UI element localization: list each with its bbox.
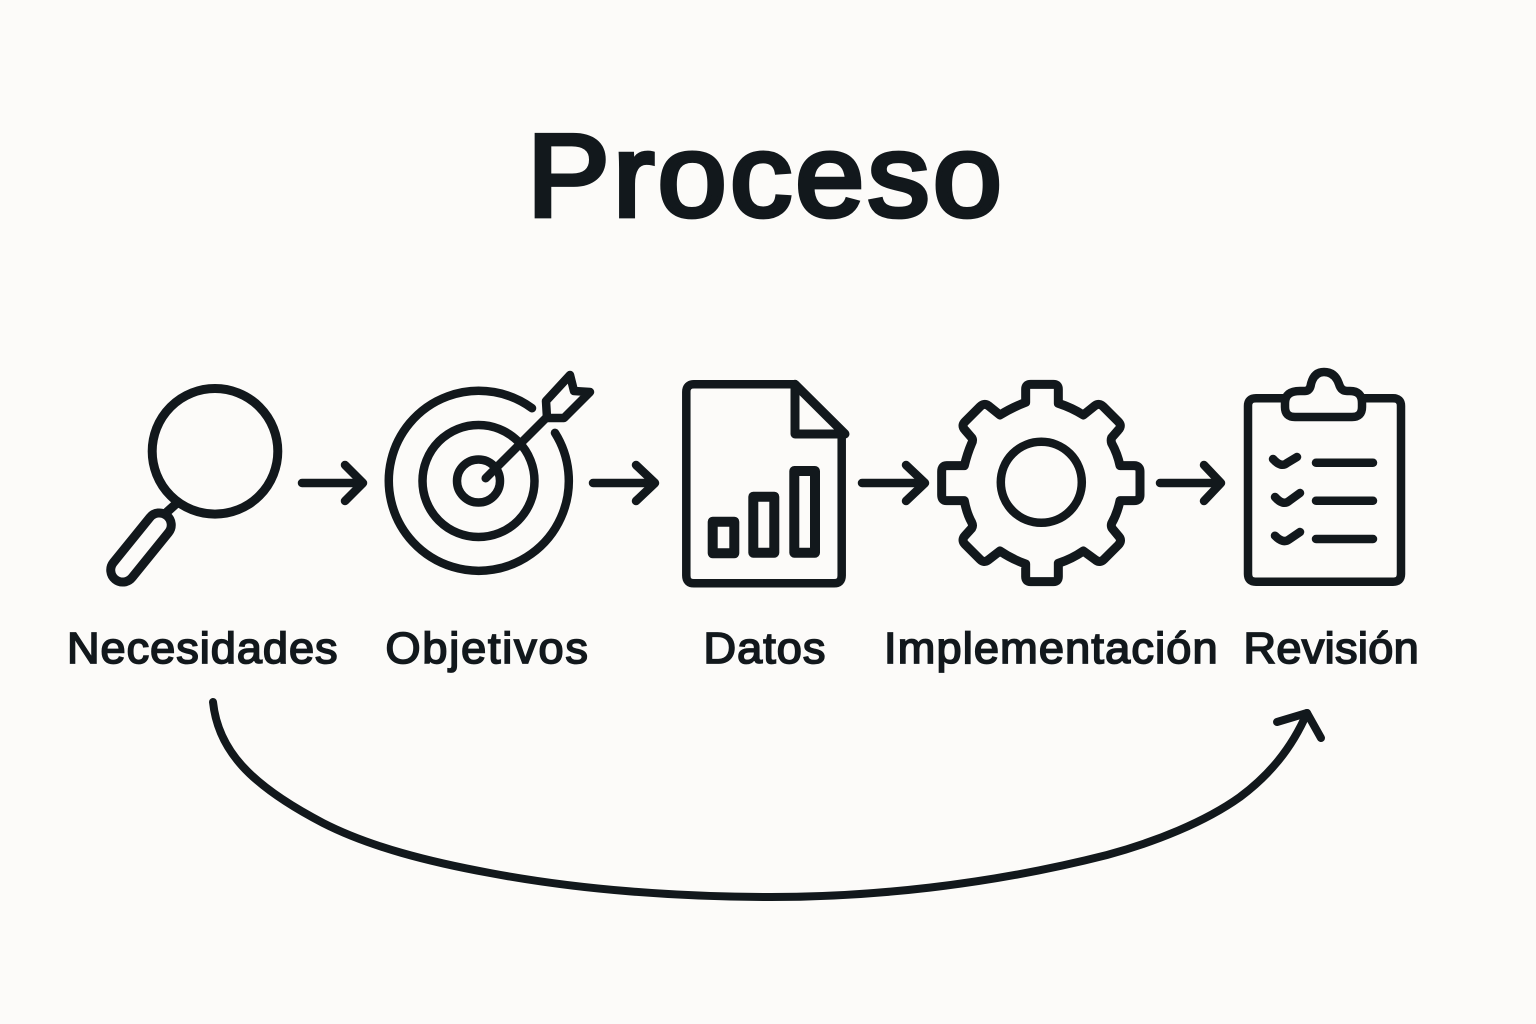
arrow: curved feedback from Necesidades to Revisión xyxy=(213,702,1321,897)
icon: clipboard checklist xyxy=(1248,372,1401,582)
arrow: step 3 to 4 xyxy=(862,465,925,501)
label: Objetivos: Objetivos xyxy=(386,624,588,673)
label: Necesidades: Necesidades xyxy=(67,624,338,673)
arrow: step 2 to 3 xyxy=(593,465,655,501)
arrow: step 4 to 5 xyxy=(1160,465,1221,501)
label: Datos: Datos xyxy=(704,624,825,673)
icon: document with bar chart xyxy=(686,384,845,583)
label: Revisión: Revisión xyxy=(1244,624,1419,673)
icon: target with dart xyxy=(389,375,590,571)
icon: magnifying glass xyxy=(106,388,278,587)
arrow: step 1 to 2 xyxy=(302,465,363,501)
icon: gear xyxy=(942,384,1140,582)
title: Proceso xyxy=(527,110,1002,241)
label: Implementación: Implementación xyxy=(884,624,1218,673)
